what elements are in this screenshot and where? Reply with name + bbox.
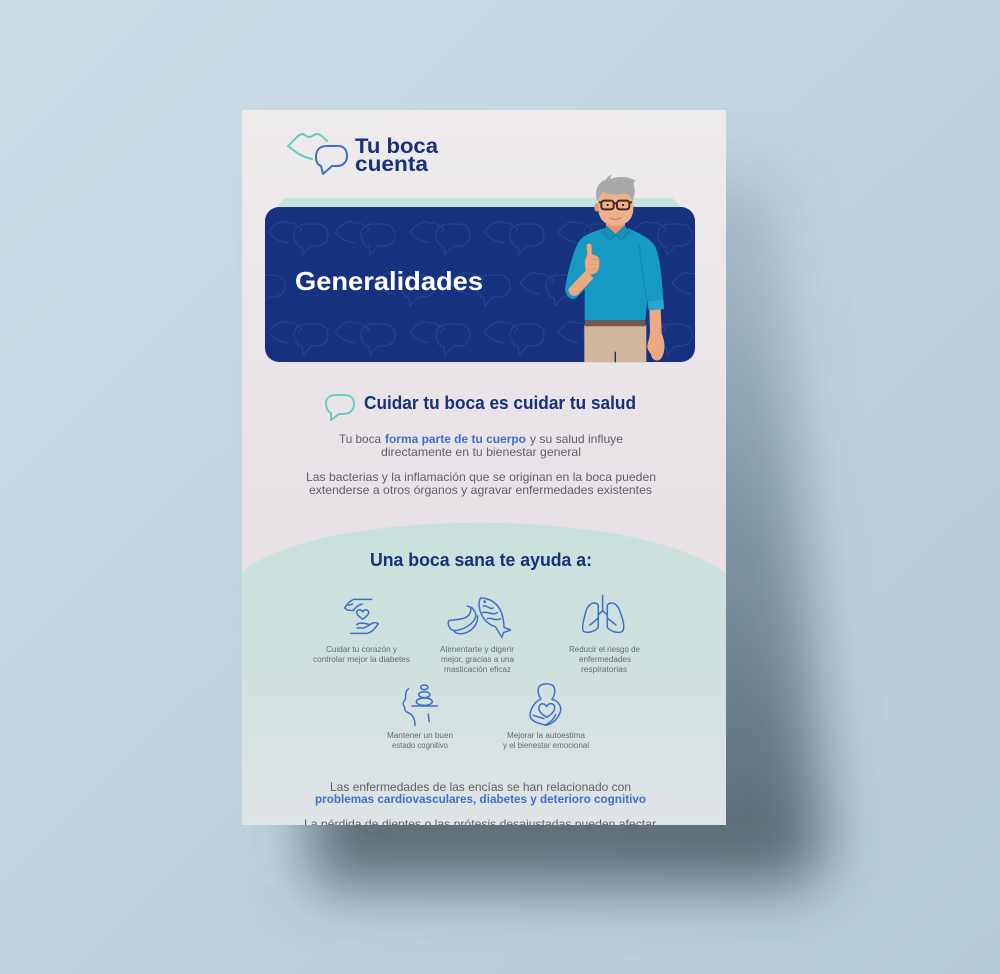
icon: head with stacked stones	[403, 685, 437, 725]
benefit: cognitive: Mantener un buen	[387, 731, 453, 740]
intro paragraph: forma parte de tu cuerpo	[385, 432, 526, 446]
hair	[596, 175, 636, 201]
glasses	[599, 201, 632, 209]
intro paragraph: y su salud influye	[530, 432, 623, 446]
benefit: heart and diabetes	[313, 599, 410, 664]
icon: lips	[288, 134, 327, 159]
benefit: nutrition	[440, 598, 515, 674]
section heading with bubble	[326, 393, 636, 420]
logo wordmark: cuenta	[355, 153, 428, 176]
hanging forearm and hand	[647, 308, 664, 360]
benefit: nutrition: Alimentarte y digerir	[440, 645, 514, 654]
logo	[288, 134, 438, 176]
illustration: older man with thumb up	[565, 175, 664, 362]
collar	[602, 226, 629, 240]
banner title: Generalidades	[295, 266, 483, 296]
raised forearm	[568, 270, 593, 296]
logo wordmark: Tu boca	[355, 135, 438, 158]
benefit: nutrition: mejor, gracias a una	[441, 655, 515, 664]
icon: person hugging heart	[530, 684, 561, 725]
logo wordmark	[355, 138, 438, 171]
benefit: self-esteem: y el bienestar emocional	[503, 741, 589, 750]
icon: lungs	[583, 595, 624, 632]
benefit: heart and diabetes: Cuidar tu corazón y	[326, 645, 397, 654]
benefit: respiratory: enfermedades	[579, 655, 631, 664]
head	[594, 203, 599, 212]
icon: hands and heart	[345, 599, 378, 633]
icon: teal speech bubble	[326, 395, 354, 420]
belt	[585, 321, 645, 326]
icon: speech bubble	[316, 146, 347, 174]
flyer page	[225, 110, 732, 831]
benefit: heart and diabetes: controlar mejor la diabetes	[313, 655, 410, 664]
fist and thumb	[585, 244, 599, 274]
benefit: respiratory: respiratorias	[581, 665, 627, 674]
benefit: self-esteem: Mejorar la autoestima	[507, 731, 586, 740]
closing paragraph: Las enfermedades de las encías se han relacionado con	[330, 780, 631, 794]
benefit: respiratory: Reducir el riesgo de	[569, 645, 641, 654]
intro paragraph: Tu boca	[339, 432, 381, 446]
benefit: nutrition: masticación eficaz	[444, 665, 511, 674]
sweater	[565, 228, 664, 320]
neck	[606, 223, 625, 236]
curved lower panel	[242, 523, 726, 825]
bacteria paragraph: Las bacterias y la inflamación que se originan en la boca pueden	[306, 470, 656, 484]
banner	[265, 207, 695, 362]
benefit: cognitive	[387, 685, 453, 750]
closing paragraph: problemas cardiovasculares, diabetes y deterioro cognitivo	[315, 792, 646, 806]
trousers	[584, 325, 646, 362]
subheading: Una boca sana te ayuda a:	[370, 550, 592, 570]
teal tab behind banner	[277, 198, 681, 208]
heading: Cuidar tu boca es cuidar tu salud	[364, 393, 636, 413]
bacteria paragraph: extenderse a otros órganos y agravar enfermedades existentes	[309, 483, 652, 497]
intro paragraph	[339, 432, 623, 459]
benefit: self-esteem	[503, 684, 589, 750]
eyes and mouth	[606, 204, 609, 206]
closing paragraph: La pérdida de dientes o las prótesis desajustadas pueden afectar	[304, 817, 656, 831]
benefit: cognitive: estado cognitivo	[392, 741, 449, 750]
bacteria paragraph	[307, 472, 656, 496]
page shadow	[300, 175, 825, 885]
benefit: respiratory	[569, 595, 641, 674]
icon: banana and fish	[448, 598, 511, 637]
closing paragraph	[305, 782, 656, 825]
intro paragraph: directamente en tu bienestar general	[381, 445, 581, 459]
